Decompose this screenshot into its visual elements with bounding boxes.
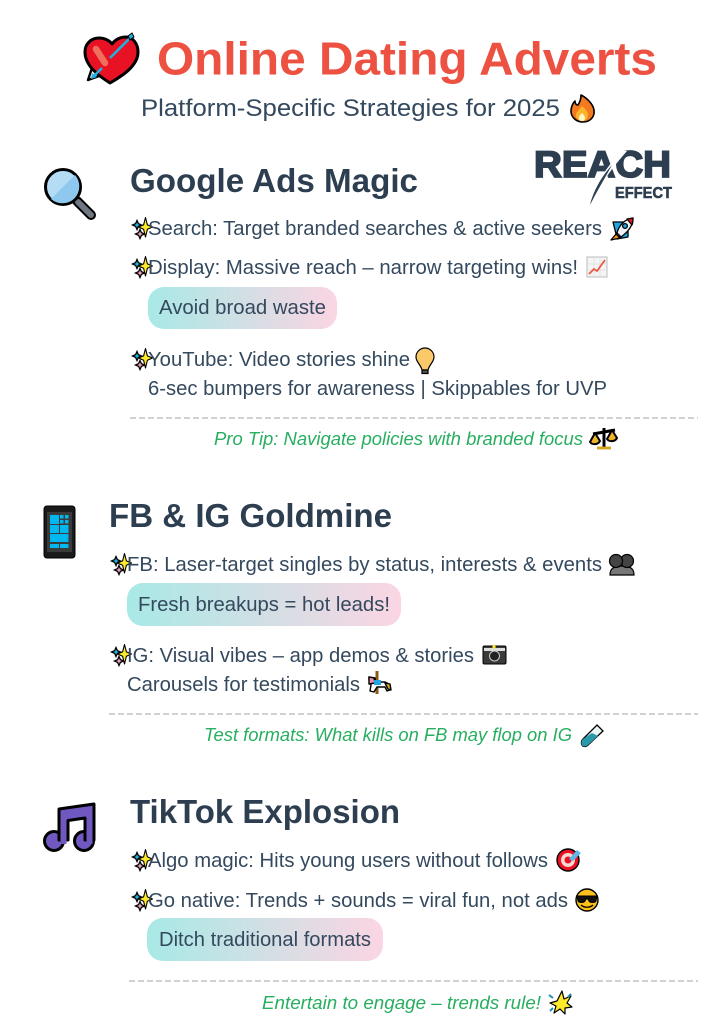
icon: chart: [587, 257, 607, 277]
heading: TikTok Explosion: TikTok Explosion: [130, 794, 400, 831]
subtitle: Platform-Specific Strategies for 2025: [141, 95, 560, 122]
icon: music notes: [44, 804, 94, 850]
list item: Display: Display: Massive reach – narrow targeting wins!: [148, 256, 578, 279]
list item: YouTube: YouTube: Video stories shine: [148, 348, 410, 371]
tip: Test formats: Test formats: What kills on FB may flop on IG: [204, 724, 572, 745]
text: Carousels: Carousels for testimonials: [127, 673, 360, 696]
icon: silhouettes: [610, 554, 634, 575]
panel: FB and IG: [44, 498, 698, 746]
icon: sunglasses face: [576, 889, 598, 911]
callout: Fresh breakups: Fresh breakups = hot leads!: [138, 593, 390, 616]
icon: rocket: [611, 218, 633, 240]
callout: Ditch traditional formats: [147, 918, 383, 961]
icon: camera: [483, 644, 506, 664]
panel: TikTok: [44, 794, 698, 1014]
list item: IG: IG: Visual vibes – app demos & stories: [127, 644, 474, 667]
list item: FB: FB: Laser-target singles by status, interests & events: [127, 553, 602, 576]
icon: fire: [571, 95, 594, 122]
heading: FB & IG Goldmine: FB & IG Goldmine: [109, 498, 392, 535]
callout: Avoid broad waste: [148, 287, 337, 329]
icon: carousel horse: [369, 671, 391, 694]
callout: Ditch traditional formats: Ditch traditional formats: [159, 928, 371, 951]
title: [85, 32, 657, 84]
icon: test tube: [581, 725, 603, 746]
logo: Reach Effect: EFFECT: [615, 185, 672, 202]
icon: light bulb: [416, 348, 434, 374]
logo: Reach Effect: [534, 144, 672, 205]
tip: Entertain: Entertain to engage – trends rule!: [262, 992, 541, 1013]
icon: scales: [590, 428, 617, 448]
logo: Reach Effect: REACH: [534, 144, 671, 185]
panel: Google Ads: [46, 144, 698, 449]
icon: magnifying glass: [46, 170, 91, 215]
icon: mobile phone: [44, 506, 75, 558]
callout: Avoid broad waste: Avoid broad waste: [159, 296, 326, 319]
tip: Pro Tip: Pro Tip: Navigate policies with branded focus: [214, 428, 583, 449]
icon: target: [557, 849, 581, 871]
callout: Fresh breakups: [127, 583, 401, 626]
list item: Search: Search: Target branded searches & active seekers: [148, 217, 602, 240]
icon: collision star: [549, 991, 572, 1014]
heading: Google Ads Magic: Google Ads Magic: [130, 163, 418, 200]
heading: main title: Online Dating Adverts: [157, 32, 657, 84]
list item: Algo magic: Algo magic: Hits young users without follows: [148, 849, 548, 872]
text: 6-sec bumpers: 6-sec bumpers for awareness | Skippables for UVP: [148, 377, 607, 400]
list item: Go native: Go native: Trends + sounds = viral fun, not ads: [148, 889, 568, 912]
icon: heart with arrow: [85, 33, 138, 83]
